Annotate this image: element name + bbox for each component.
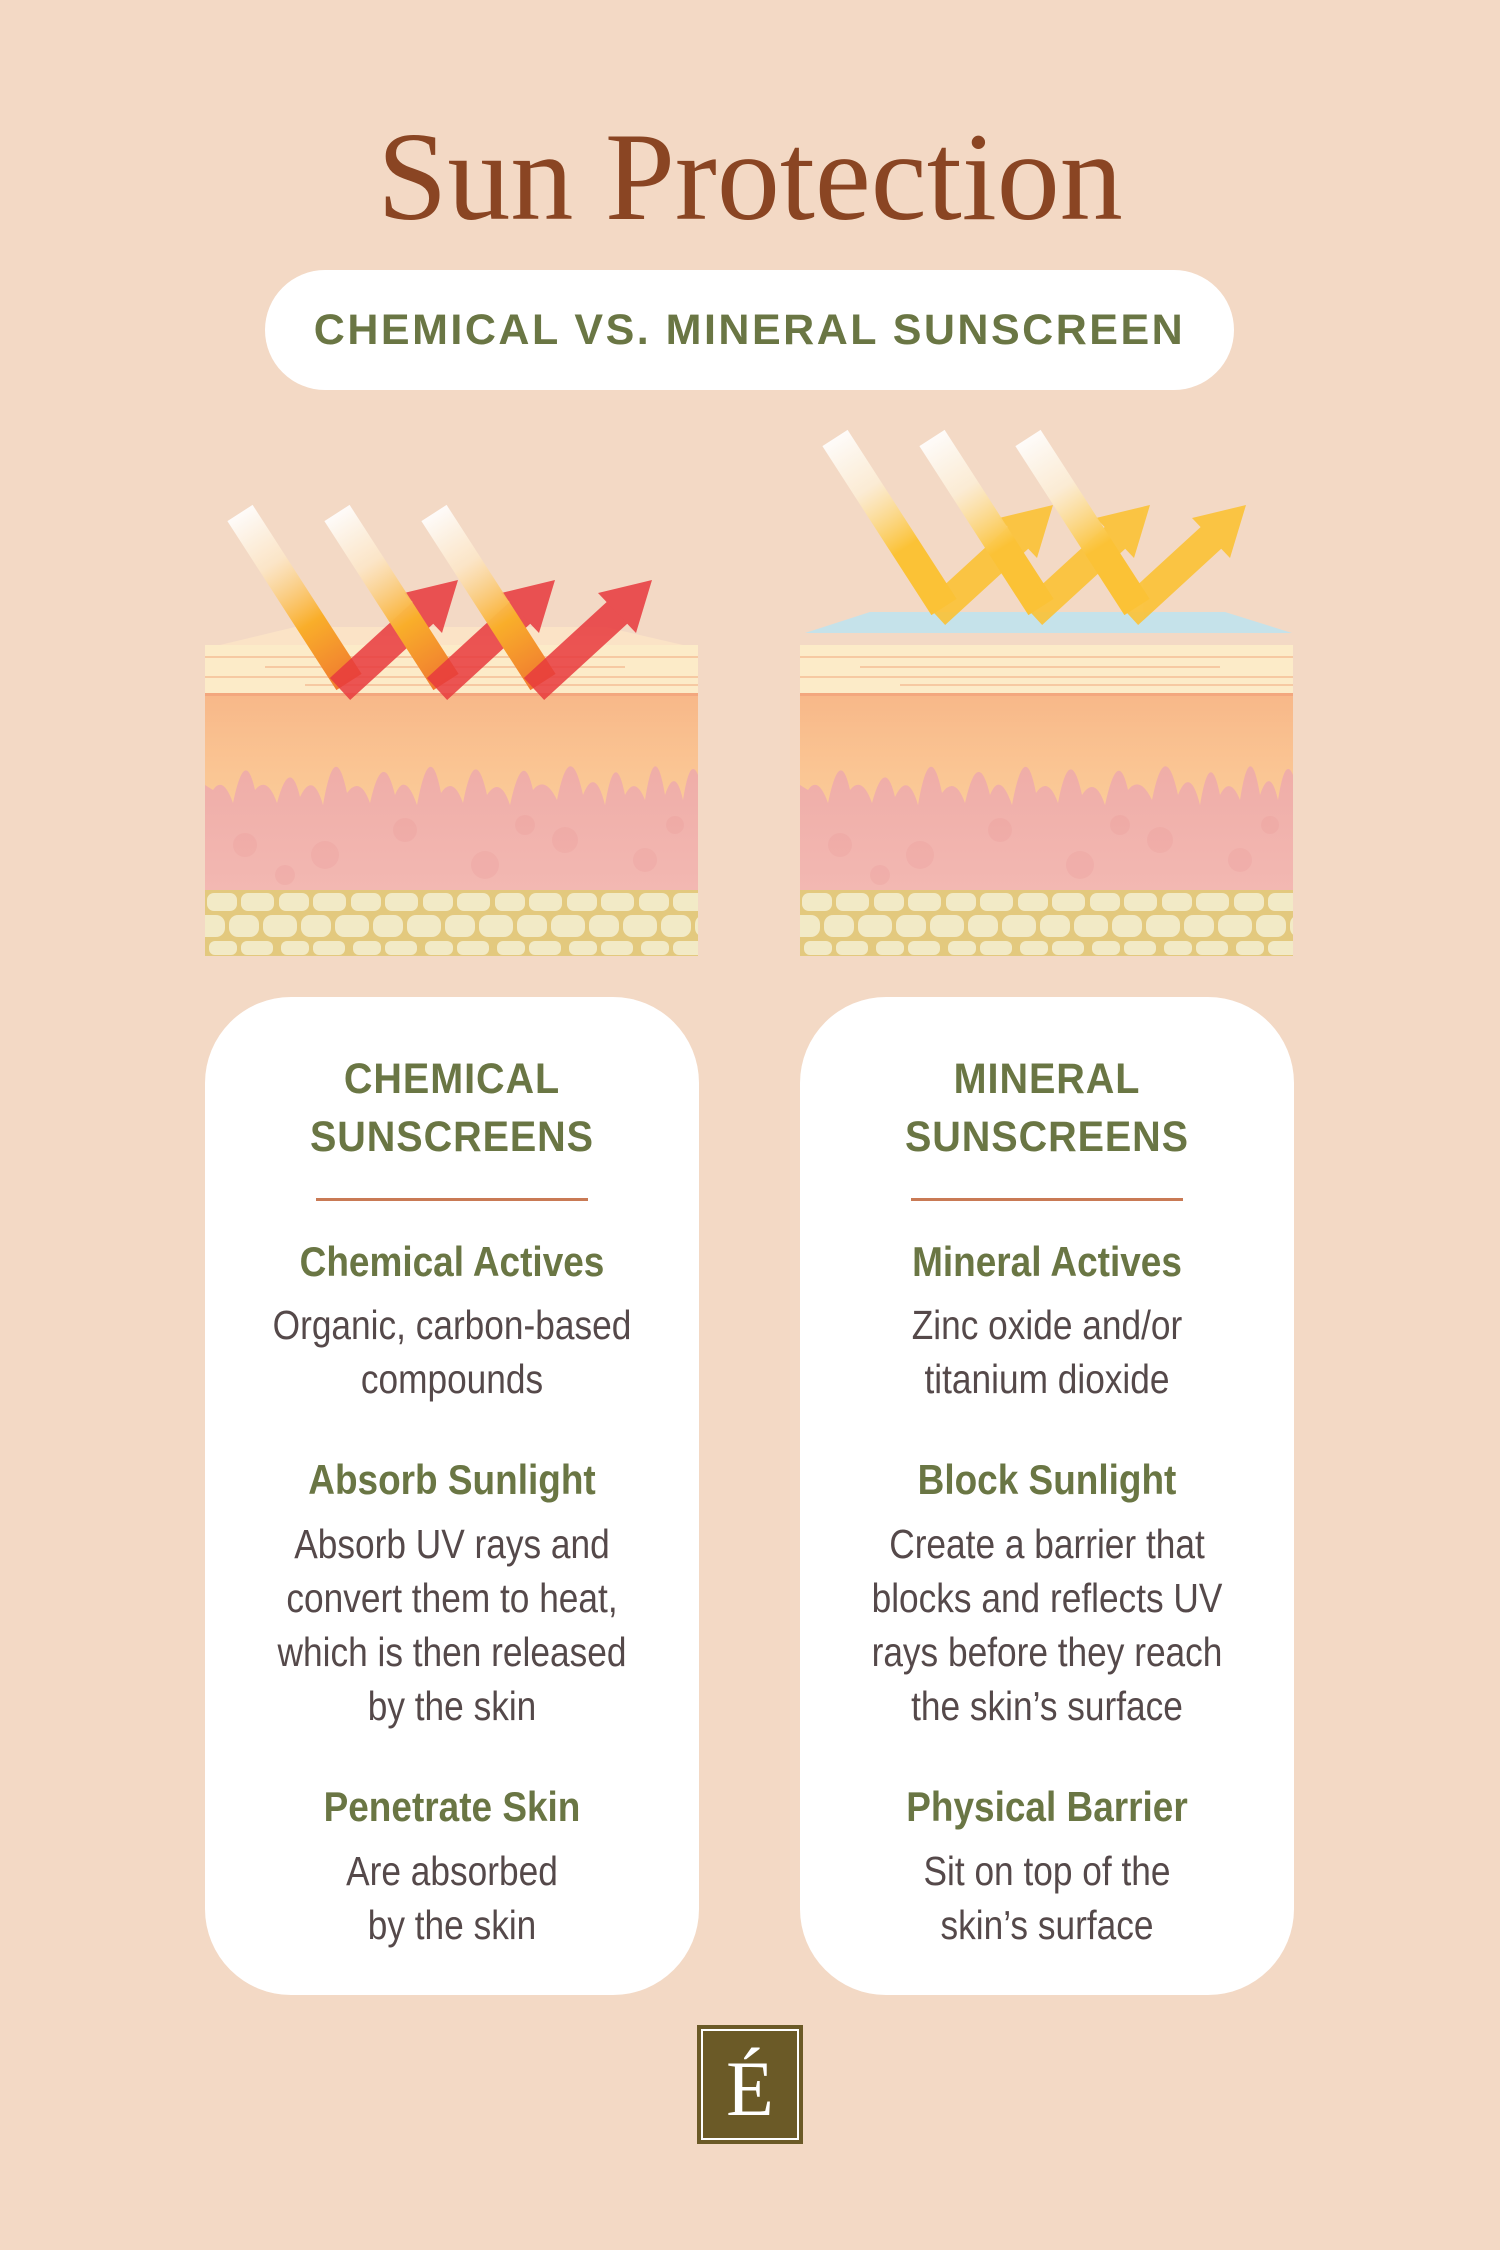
text: penetrate skin: Are absorbed <box>346 1848 558 1894</box>
text: block sunlight: rays before they reach <box>872 1629 1222 1675</box>
logo <box>697 2025 803 2144</box>
subhead: absorb sunlight: Absorb Sunlight <box>308 1456 596 1503</box>
subhead: physical barrier: Physical Barrier <box>906 1783 1188 1830</box>
heading: chemical: SUNSCREENS <box>310 1113 594 1161</box>
arrows: mineral reflected rays <box>835 438 1246 614</box>
logo: É <box>726 2045 774 2132</box>
text: mineral actives: titanium dioxide <box>924 1356 1169 1402</box>
text: absorb sunlight <box>278 1521 626 1729</box>
text: absorb sunlight: convert them to heat, <box>286 1575 618 1621</box>
text: physical barrier: Sit on top of the <box>923 1848 1170 1894</box>
text: chemical actives: compounds <box>361 1356 543 1402</box>
title: Sun Protection <box>377 108 1123 247</box>
heading: mineral: SUNSCREENS <box>905 1113 1189 1161</box>
text: physical barrier: skin’s surface <box>941 1902 1153 1948</box>
text: penetrate skin: by the skin <box>368 1902 536 1948</box>
text: block sunlight: Create a barrier that <box>889 1521 1205 1567</box>
subtitle pill <box>265 270 1234 390</box>
text: absorb sunlight: Absorb UV rays and <box>294 1521 610 1567</box>
subhead: block sunlight: Block Sunlight <box>918 1456 1176 1503</box>
subhead: chemical actives: Chemical Actives <box>300 1238 604 1285</box>
text: penetrate skin <box>346 1848 558 1948</box>
subtitle pill: CHEMICAL VS. MINERAL SUNSCREEN <box>314 306 1185 354</box>
heading: chemical: CHEMICAL <box>344 1055 560 1103</box>
subhead: mineral actives: Mineral Actives <box>912 1238 1182 1285</box>
subhead: penetrate skin: Penetrate Skin <box>324 1783 580 1830</box>
text: mineral actives: Zinc oxide and/or <box>912 1302 1182 1348</box>
text: block sunlight <box>872 1521 1222 1729</box>
panel: chemical sunscreens <box>205 997 699 1995</box>
skin: chemical <box>205 627 698 956</box>
heading: mineral <box>905 1055 1189 1161</box>
text: absorb sunlight: which is then released <box>278 1629 626 1675</box>
arrows: chemical absorbed rays <box>240 513 652 689</box>
skin: mineral <box>800 612 1293 956</box>
text: chemical actives <box>273 1302 631 1402</box>
text: absorb sunlight: by the skin <box>368 1683 536 1729</box>
text: mineral actives <box>912 1302 1182 1402</box>
panel: mineral sunscreens <box>800 997 1294 1995</box>
text: chemical actives: Organic, carbon-based <box>273 1302 631 1348</box>
text: block sunlight: the skin’s surface <box>911 1683 1183 1729</box>
text: block sunlight: blocks and reflects UV <box>872 1575 1222 1621</box>
skin illustrations <box>205 430 1293 956</box>
heading: mineral: MINERAL <box>954 1055 1140 1103</box>
text: physical barrier <box>923 1848 1170 1948</box>
heading: chemical <box>310 1055 594 1161</box>
